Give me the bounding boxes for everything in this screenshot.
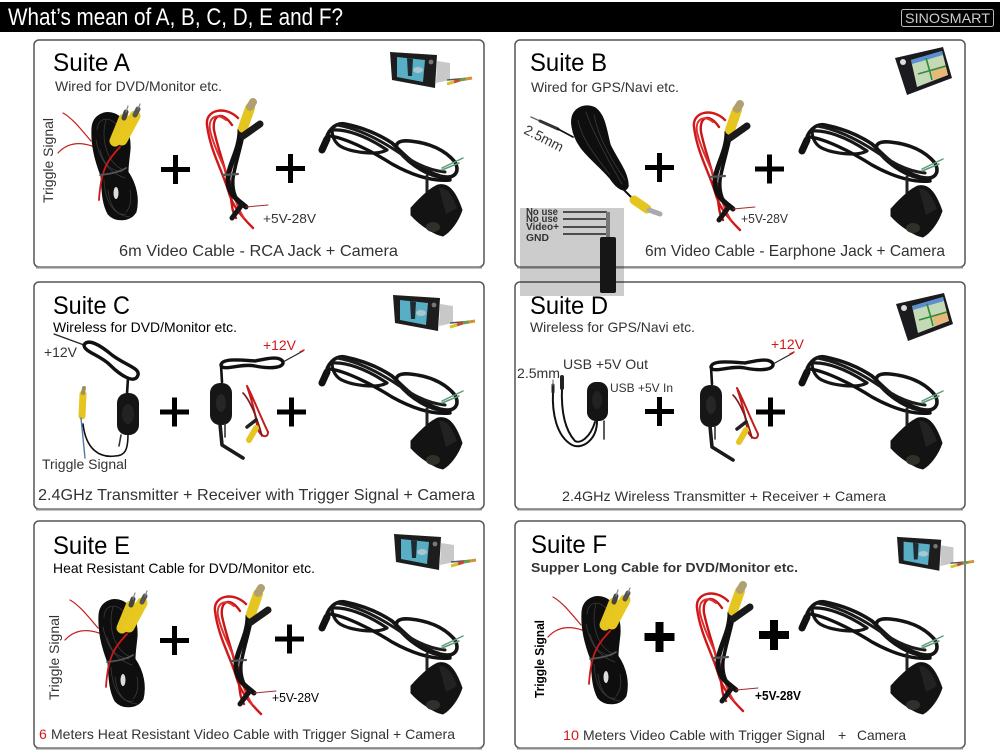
- heading: Suite C: Suite C: [53, 292, 130, 320]
- label: trigger signal: Triggle Signal: [46, 615, 62, 700]
- logo: SINOSMART: SINOSMART: [905, 10, 990, 26]
- heading: Suite E: Suite E: [53, 532, 130, 560]
- voltage label: +5V-28V: [741, 212, 789, 226]
- voltage label: +5V-28V: [263, 211, 316, 226]
- heading: Suite A: Suite A: [53, 49, 130, 77]
- power cable: [697, 585, 758, 711]
- caption: 6m Video Cable - Earphone Jack + Camera: [645, 243, 945, 260]
- icon: car DVD monitor: [390, 52, 472, 88]
- panel: Suite F: [515, 521, 974, 748]
- label: +12V red: +12V: [263, 337, 297, 353]
- video cable with RCA jacks: [65, 591, 147, 707]
- subtitle: Wired for DVD/Monitor etc.: [55, 78, 222, 94]
- caption: Camera: [857, 727, 906, 743]
- video cable with RCA jacks: [58, 104, 140, 220]
- camera with cable: [322, 124, 463, 236]
- camera with cable: [802, 357, 943, 469]
- camera with cable: [322, 602, 463, 714]
- caption: Meters Video Cable with Trigger Signal: [583, 727, 825, 743]
- panel: Suite C: [34, 282, 484, 510]
- plus sign: [277, 398, 306, 426]
- GPS wireless transmitter: [553, 377, 608, 446]
- caption: 10: [563, 727, 579, 743]
- voltage label: +5V-28V: [272, 690, 319, 705]
- label: trigger signal: Triggle Signal: [42, 456, 127, 472]
- subtitle: Wireless for DVD/Monitor etc.: [53, 319, 237, 335]
- power cable: [207, 102, 268, 228]
- heading: Suite B: Suite B: [530, 49, 607, 77]
- plus sign: [759, 620, 789, 650]
- earphone-jack video cable: [531, 106, 660, 214]
- subtitle: Heat Resistant Cable for DVD/Monitor etc.: [53, 560, 315, 576]
- panel: Suite B: [515, 40, 965, 268]
- wireless receiver: [210, 350, 304, 458]
- icon: car DVD monitor: [897, 537, 974, 571]
- plus sign: [160, 626, 189, 655]
- icon: GPS navigator: [896, 293, 953, 341]
- label: USB in: USB +5V In: [610, 381, 673, 395]
- wireless transmitter: [54, 334, 139, 458]
- label: +12V: +12V: [44, 344, 78, 360]
- inset: earphone jack pinout: [520, 207, 624, 296]
- subtitle: Wired for GPS/Navi etc.: [531, 79, 679, 95]
- icon: car DVD monitor: [394, 534, 476, 570]
- plus sign: [276, 154, 305, 183]
- plus sign: [644, 622, 674, 652]
- camera with cable: [322, 357, 463, 469]
- label: trigger signal: Triggle Signal: [533, 620, 547, 698]
- heading: Suite F: Suite F: [531, 531, 607, 559]
- power cable: [694, 104, 755, 230]
- caption: Meters Heat Resistant Video Cable with Trigger Signal + Camera: [51, 726, 455, 742]
- voltage label: +5V-28V: [755, 689, 802, 703]
- plus sign: [275, 624, 304, 654]
- inset: earphone jack pinout: No use: [526, 207, 558, 218]
- plus sign: [161, 155, 190, 184]
- caption: +: [838, 727, 846, 743]
- label: +12V red: +12V: [771, 336, 805, 352]
- panel: Suite A: [34, 40, 484, 268]
- power cable: [215, 588, 276, 714]
- plus sign: [645, 397, 674, 426]
- panel: Suite D: [515, 282, 965, 510]
- label: 2.5mm: 2.5mm: [517, 365, 560, 381]
- panel: Suite E: [34, 521, 484, 748]
- plus sign: [755, 154, 784, 184]
- plus sign: [160, 398, 189, 426]
- header bar: [0, 2, 1000, 32]
- label: USB out: USB +5V Out: [563, 356, 648, 372]
- label: 2.5mm: 2.5mm: [522, 121, 566, 155]
- caption: 6m Video Cable - RCA Jack + Camera: [119, 243, 398, 260]
- caption: 2.4GHz Transmitter + Receiver with Trigger Signal + Camera: [38, 487, 475, 504]
- inset: earphone jack pinout: GND: [526, 233, 549, 244]
- camera with cable: [802, 125, 943, 237]
- icon: GPS navigator: [895, 47, 952, 95]
- title: What’s mean of A, B, C, D, E and F?: [8, 4, 343, 31]
- video cable with RCA jacks: [548, 588, 630, 704]
- inset: earphone jack pinout: Video+: [526, 222, 559, 233]
- plus sign: [645, 153, 674, 182]
- inset: earphone jack pinout: No use: [526, 214, 558, 225]
- caption: 2.4GHz Wireless Transmitter + Receiver + Camera: [562, 488, 886, 504]
- caption: 6: [39, 726, 47, 742]
- plus sign: [756, 398, 785, 426]
- camera with cable: [802, 602, 943, 714]
- subtitle: Wireless for GPS/Navi etc.: [530, 319, 695, 335]
- heading: Suite D: Suite D: [530, 292, 608, 320]
- icon: car DVD monitor: [393, 295, 475, 331]
- wireless receiver: [700, 352, 794, 460]
- label: trigger signal: Triggle Signal: [40, 118, 56, 203]
- subtitle: Supper Long Cable for DVD/Monitor etc.: [531, 560, 798, 575]
